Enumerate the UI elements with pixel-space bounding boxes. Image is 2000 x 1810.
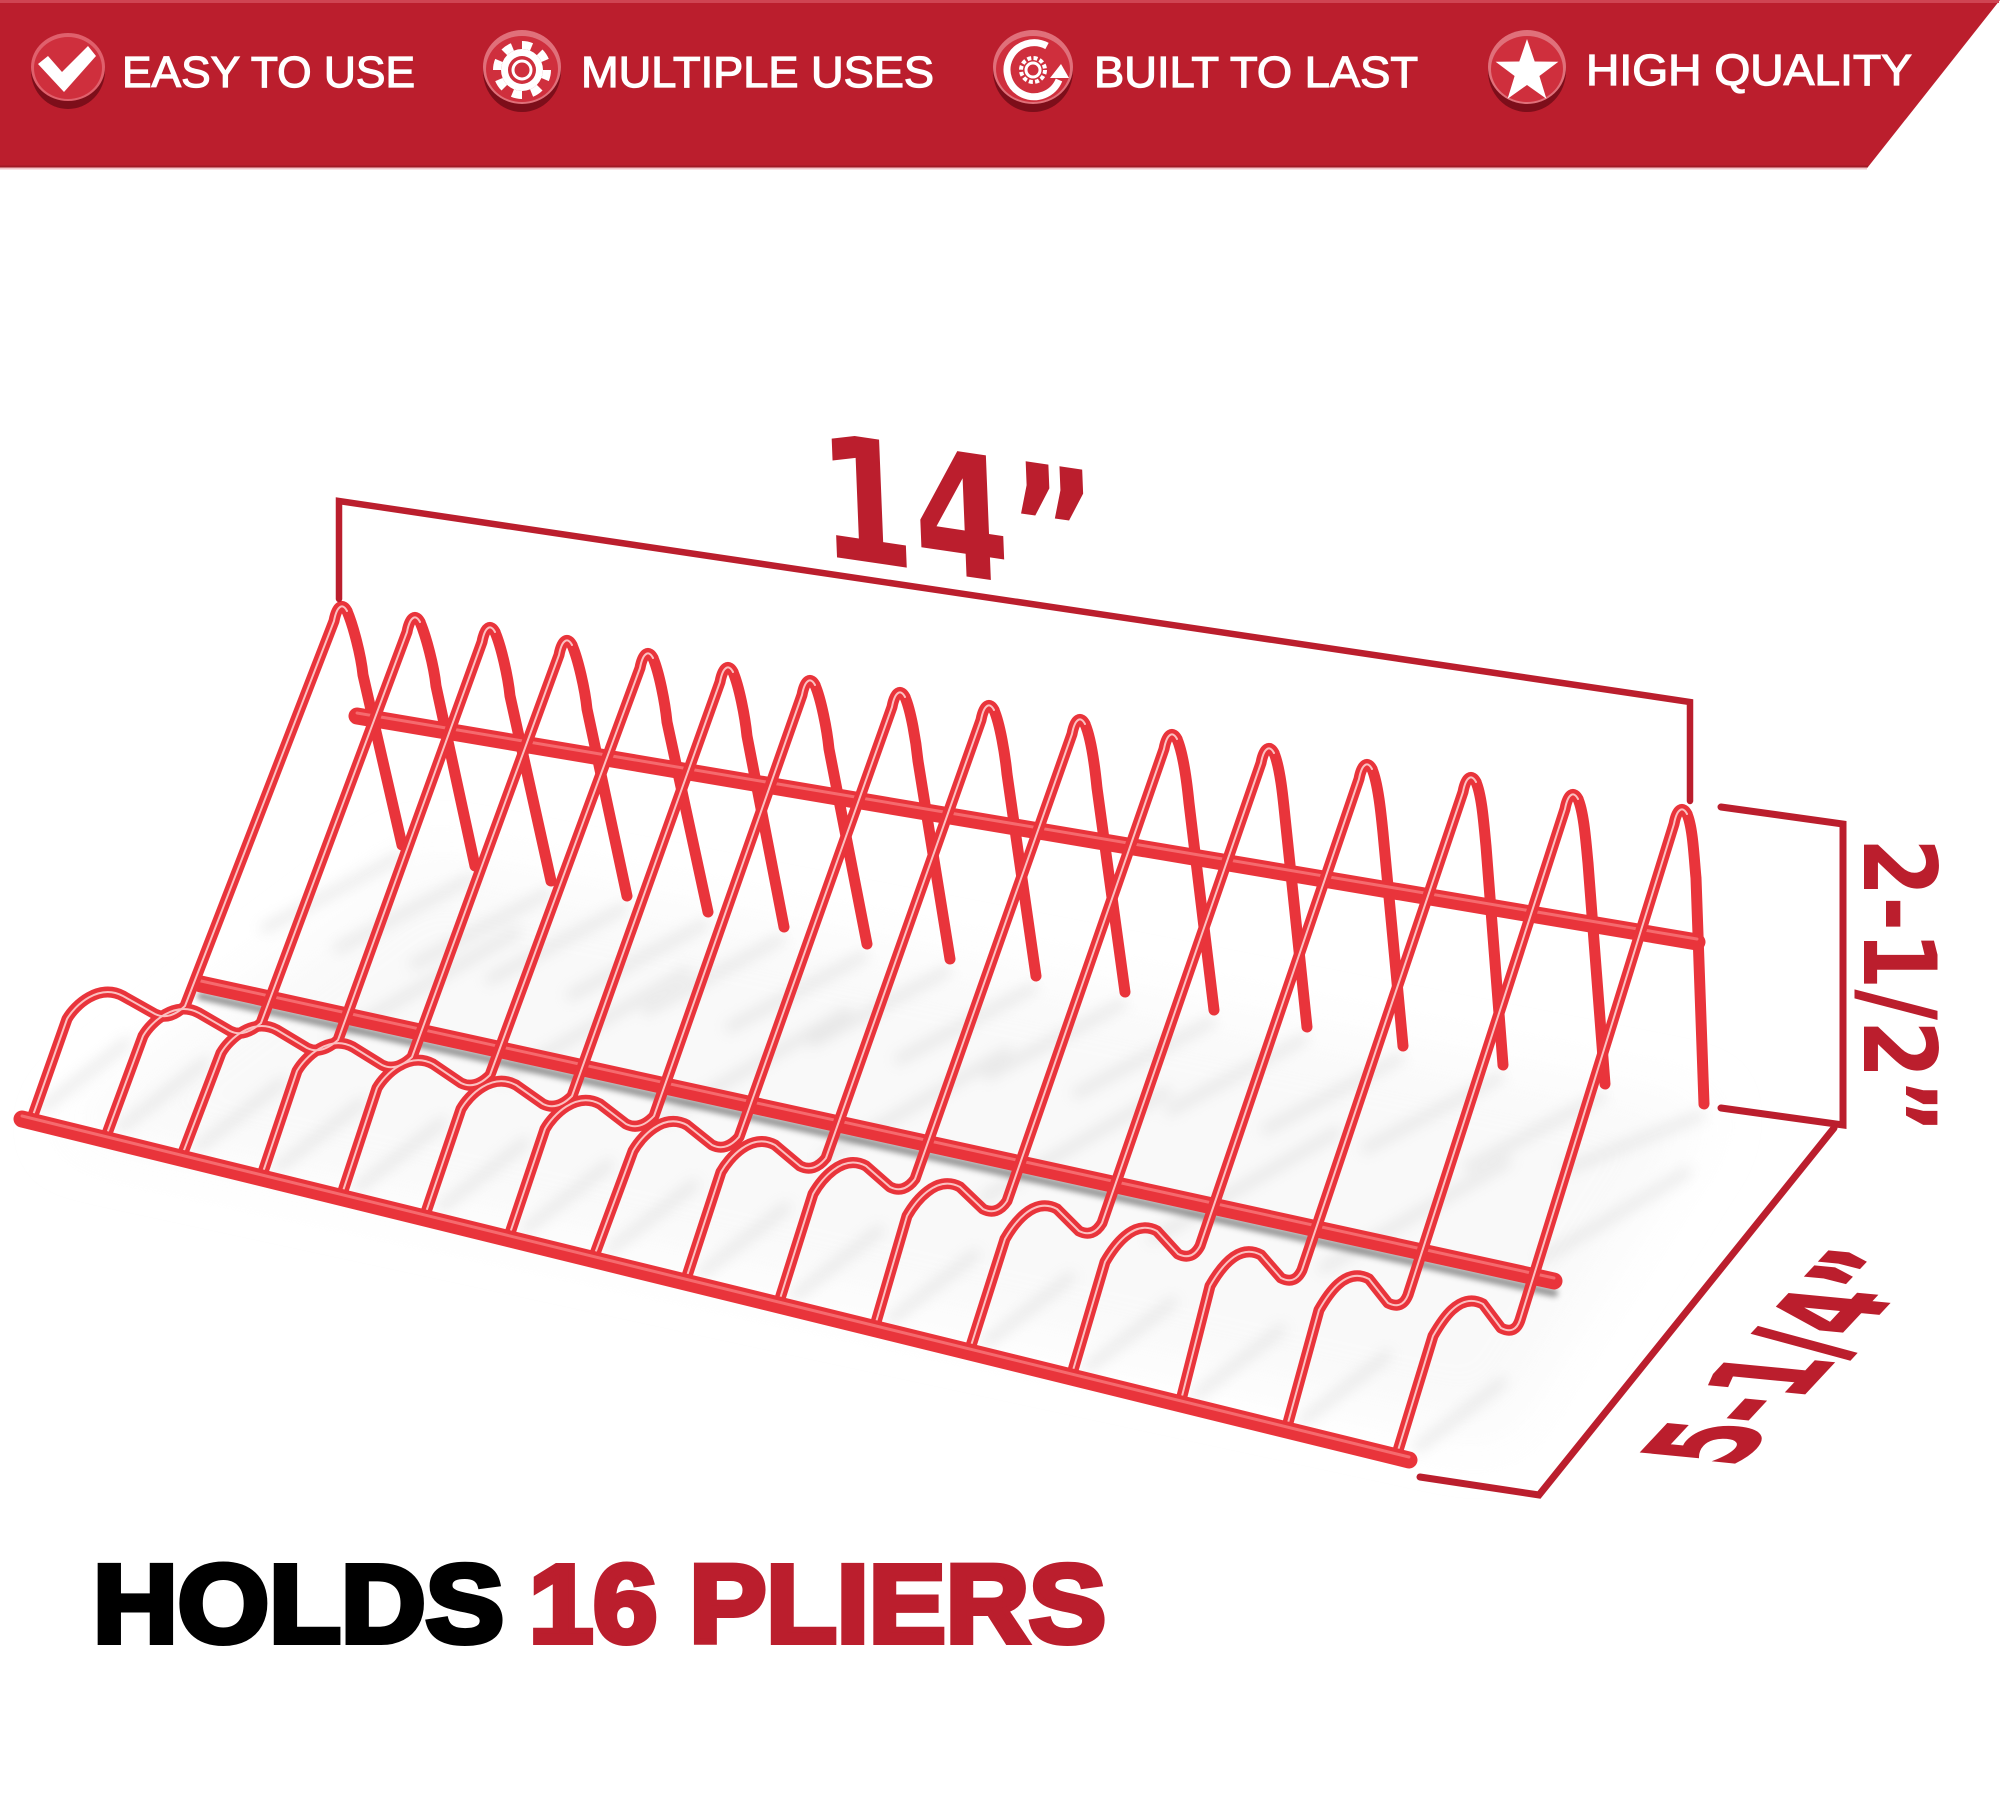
label: easy to use: EASY TO USE <box>122 48 415 97</box>
dimension bracket: depth <box>1420 1128 1834 1495</box>
caption words: 16 pliers: 16 PLIERS <box>529 1543 1106 1666</box>
dimension label: 2-1/2 inches: 2-1/2” <box>1840 838 1958 1133</box>
dimension bracket: width <box>339 501 1690 801</box>
icon: gear with circular arrow <box>993 30 1073 112</box>
dimension label: 14 inches: 14” <box>815 397 1103 637</box>
rack back legs <box>347 611 1704 1104</box>
icon: gear <box>483 30 561 112</box>
icon: check mark <box>31 33 105 109</box>
lower cross rod <box>201 981 1554 1293</box>
label: multiple uses: MULTIPLE USES <box>581 48 934 97</box>
ground shadow <box>40 855 1710 1450</box>
label: high quality: HIGH QUALITY <box>1586 46 1912 95</box>
rack wires <box>31 606 1687 1457</box>
dimension bracket: height <box>1721 807 1843 1125</box>
front rod <box>22 1116 1409 1460</box>
upper cross rod <box>357 713 1697 942</box>
caption: holds 16 pliers <box>93 1543 1106 1666</box>
caption word: holds: HOLDS <box>93 1543 504 1666</box>
icon: star <box>1488 30 1566 112</box>
dimension label: 5-1/4 inches: 5-1/4” <box>1609 1242 1967 1471</box>
header banner <box>0 0 2000 168</box>
label: built to last: BUILT TO LAST <box>1094 48 1418 97</box>
banner background <box>0 0 2000 167</box>
